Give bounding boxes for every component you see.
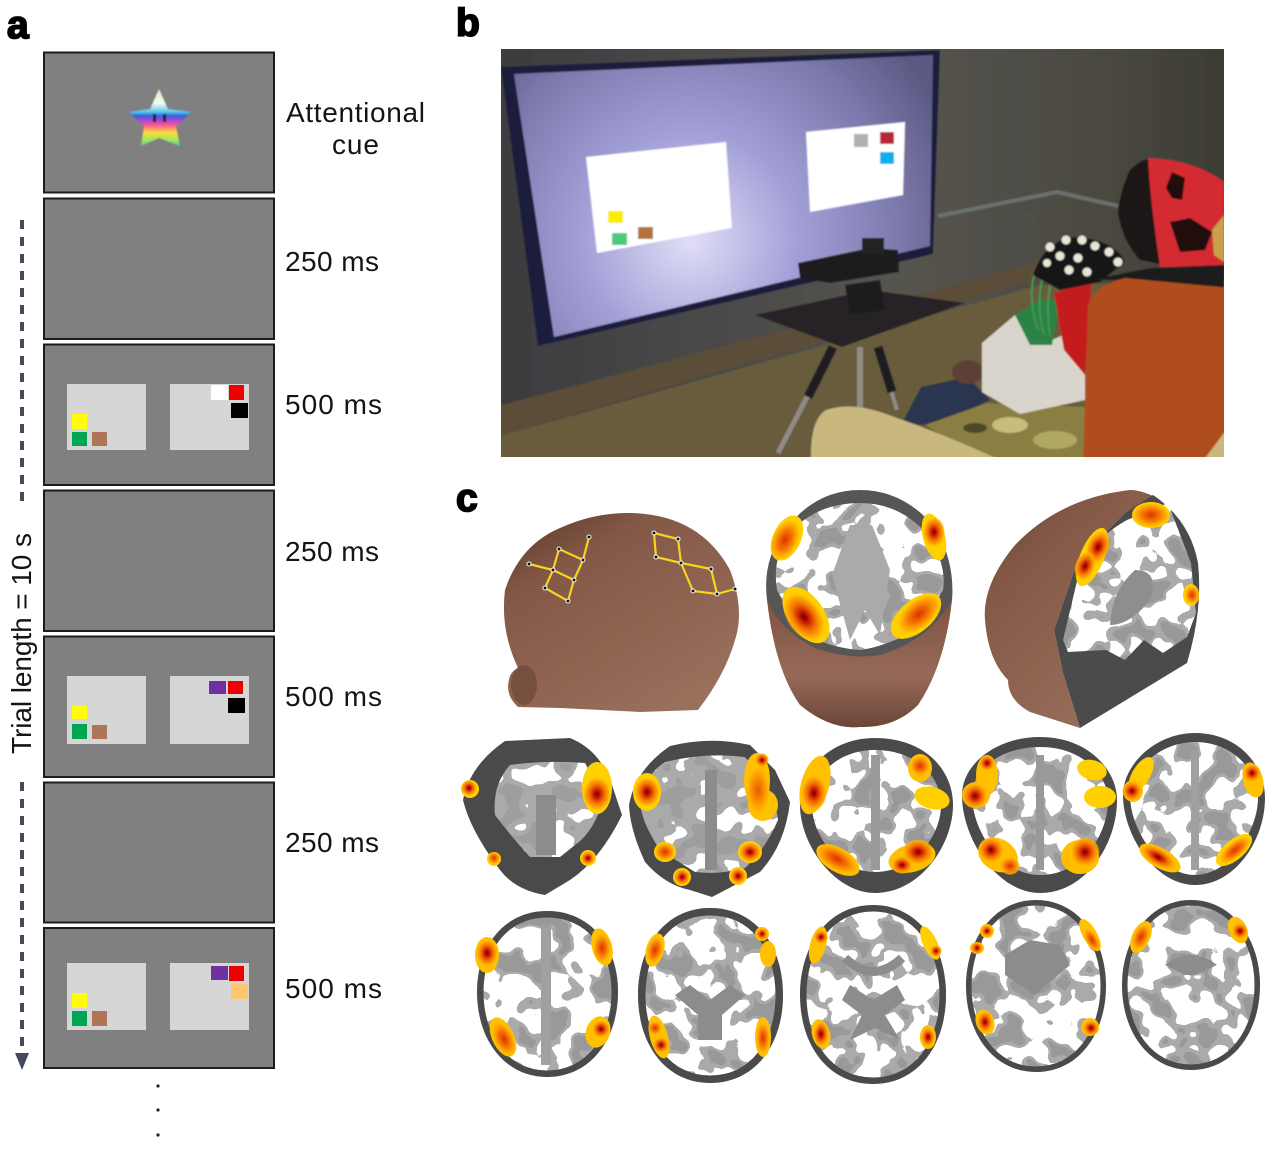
arrow: trial timeline (15, 220, 29, 1070)
slice row 2: slice 1 (461, 738, 622, 895)
hand (952, 360, 984, 384)
panel label c: c (456, 477, 478, 520)
slice row 3: slice 5 (1122, 900, 1260, 1070)
red vest (1054, 280, 1092, 375)
face and hair (1118, 159, 1160, 264)
optode array: left (527, 535, 591, 603)
frame: attentional cue with star (44, 52, 274, 192)
panel: trial sequence (44, 52, 274, 1137)
slice row 2: slice 3 (794, 738, 953, 893)
optode array: right (652, 531, 737, 596)
orange chair (1083, 278, 1230, 465)
slice row 2: slice 4 (962, 737, 1117, 893)
head: side view with optode array (504, 513, 739, 712)
label: attentional cue: cue (332, 129, 379, 160)
right stimulus panel (806, 122, 905, 212)
beige sofa arm (811, 406, 1000, 460)
panel label b: b (456, 2, 480, 45)
white jacket (982, 315, 1085, 414)
label: 500 ms: 500 ms (285, 973, 382, 1004)
continuation dots (156, 1084, 160, 1137)
icon: rainbow star (129, 89, 191, 146)
panel label a: a (7, 4, 29, 47)
EEG cap (1033, 236, 1125, 290)
head: top cut view (764, 490, 952, 727)
slice row 2: slice 5 (1122, 733, 1267, 885)
head: oblique cut view (985, 490, 1200, 728)
label: attentional cue (286, 97, 425, 160)
wall pipe and outlet (938, 190, 1119, 218)
label: 250 ms: 250 ms (285, 536, 379, 567)
frame: stimulus 3 (44, 928, 274, 1068)
label: 500 ms: 500 ms (285, 389, 382, 420)
frame: blank 3 (44, 782, 274, 922)
label: 500 ms: 500 ms (285, 681, 382, 712)
panel: brain sensitivity maps (461, 490, 1267, 1084)
label: 250 ms: 250 ms (285, 246, 379, 277)
frame: blank 1 (44, 198, 274, 339)
slice row 3: slice 1 (475, 911, 618, 1077)
frame: stimulus 1 (44, 344, 274, 485)
frame: blank 2 (44, 490, 274, 631)
label: 250 ms: 250 ms (285, 827, 379, 858)
tripod and projector (755, 238, 965, 453)
green collar and braids (1015, 275, 1060, 345)
floor (495, 280, 1230, 465)
frame: stimulus 2 (44, 636, 274, 777)
label: trial length: Trial length = 10 s (6, 533, 37, 754)
label: attentional cue: Attentional (286, 97, 425, 128)
wall (495, 45, 1230, 465)
dark chair strap (1103, 264, 1224, 288)
slice row 2: slice 2 (629, 741, 790, 897)
floral cushion (925, 402, 1086, 457)
red headscarf (1148, 158, 1224, 267)
heat spots (1069, 502, 1199, 606)
jeans (902, 377, 990, 425)
panel: experiment photo (495, 45, 1230, 465)
projected screen (514, 55, 933, 337)
slice row 3: slice 3 (800, 905, 946, 1084)
left stimulus panel (586, 142, 732, 253)
slice row 3: slice 4 (966, 900, 1106, 1072)
baseboard (495, 262, 1045, 437)
screen frame (501, 50, 940, 346)
slice row 3: slice 2 (638, 908, 783, 1083)
heat spots (764, 510, 951, 652)
